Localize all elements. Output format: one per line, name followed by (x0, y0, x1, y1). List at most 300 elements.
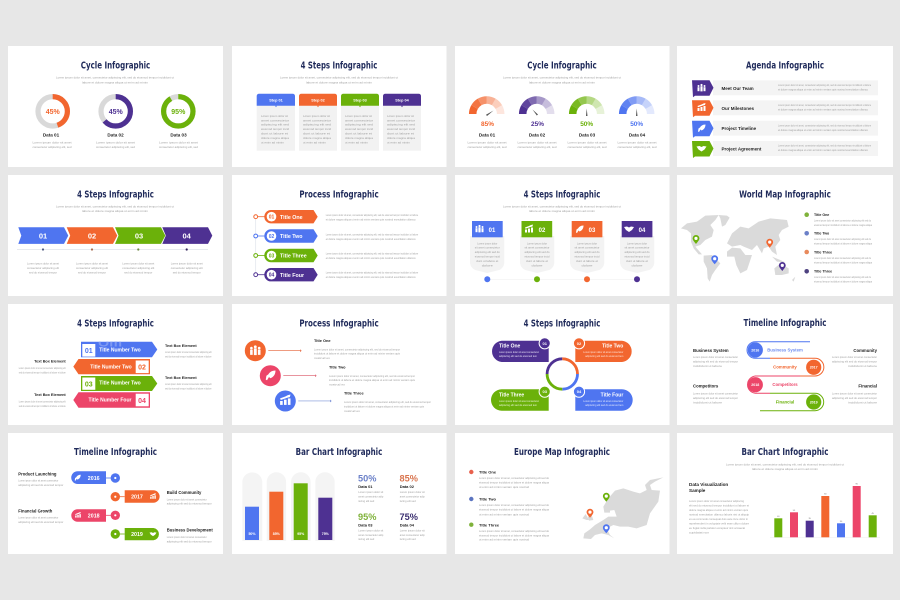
ribbon 02 (73, 359, 150, 374)
step text blocks: consectetur adipiscing elit (27, 266, 59, 270)
map legend 1: Title One (814, 213, 829, 217)
step 03 column: Lorem ipsum dolor sit (345, 114, 372, 118)
gauge 03: consectetur adipiscing elit, sed (568, 145, 607, 149)
node 2017: Community (773, 365, 797, 370)
milestone 2018: Financial Growth (18, 508, 53, 513)
step 02 column: dolore magna aliqua (303, 136, 332, 140)
data labels (32, 133, 198, 149)
card 04: Lorem ipsum dolor (627, 241, 647, 245)
side text boxes: sed do eiusmod tempor incididunt ut labore et dolore (165, 354, 212, 358)
donut 03: 95% (171, 109, 186, 116)
process step 3: Title Three (280, 254, 307, 260)
stat 75%: amet consectetur adip (400, 533, 425, 537)
agenda row 3: Project Timeline (722, 126, 757, 131)
process step 1: Lorem ipsum dolor sit amet, consectetur adipiscing elit, sed do eiusmod tempor incididunt ut labore (326, 213, 418, 217)
ribbon 02: Title Number Two (90, 364, 132, 370)
step 02 column: eiusmod tempor incid (303, 127, 332, 131)
panel: cycle infographic donuts (8, 46, 223, 167)
process step 4: et dolore magna aliqua ut enim ad minim veniam quis nostrud exercitation ullamco (326, 275, 416, 279)
map legend 4: eiusmod tempor incididunt ut labore et dolore magna aliqua (814, 280, 872, 284)
milestone 2019: Business Development (167, 528, 213, 532)
process item 3 (275, 390, 431, 413)
node 2016 (748, 342, 803, 358)
gauge 01: Data 01 (479, 133, 496, 138)
milestone 2017: adipiscing elit sed do eiusmod tempor (167, 502, 212, 506)
step 03 column: dolore magna aliqua (345, 136, 374, 140)
title: World Map Infographic (739, 190, 831, 200)
bar chart: 40 (777, 516, 780, 518)
chevron 04 (162, 227, 212, 244)
title: Europe Map Infographic (514, 447, 610, 458)
connector line (487, 278, 637, 280)
step 02 column: Lorem ipsum dolor sit (303, 114, 330, 118)
intro text (56, 204, 174, 213)
stat 95%: Lorem ipsum dolor sit (358, 528, 383, 532)
card 02: dolore (532, 263, 543, 267)
process step 1: et dolore magna aliqua ut enim ad minim veniam quis nostrud exercitation ullamco (326, 218, 416, 222)
step card 4 (573, 386, 633, 411)
map legend 1: eiusmod tempor incididunt ut labore et dolore magna aliqua (814, 223, 872, 227)
step 01 column: amet consectetur (261, 118, 289, 122)
card 03: dolore (582, 263, 593, 267)
milestone 2017: Lorem ipsum dolor sit amet consectetur (167, 497, 207, 501)
gauge 04: Data 04 (629, 133, 646, 138)
map legend 2: eiusmod tempor incididunt ut labore et dolore magna aliqua (814, 242, 872, 246)
process step 2 (254, 229, 418, 243)
map legend 1 (804, 212, 872, 227)
map legend 2: Title Two (814, 232, 830, 236)
step text blocks: sed do eiusmod tempor (124, 270, 152, 274)
title: 4 Steps Infographic (77, 318, 154, 329)
chevron 04: 04 (183, 231, 192, 240)
data labels: Data 01 (43, 133, 60, 138)
side text boxes: Lorem ipsum dolor sit amet consectetur adipiscing elit (165, 382, 212, 386)
stat 50%: Lorem ipsum dolor sit (358, 490, 383, 494)
process step 2: Title Two (280, 234, 303, 240)
bar chart: 35 (808, 518, 812, 520)
step card 4: adipiscing elit sed do eiusmod tem (585, 403, 624, 407)
map legend 4: Title Three (814, 270, 832, 274)
heading: Sample (689, 488, 706, 493)
process item 2: Title Two (329, 364, 346, 370)
side text boxes: Lorem ipsum dolor sit amet consectetur adipiscing elit (165, 350, 212, 354)
milestone 2016: Lorem ipsum dolor sit amet consectetur (18, 478, 58, 482)
node 2017: 2017 (810, 366, 818, 370)
step card 2 (573, 338, 632, 362)
paragraph (689, 499, 749, 534)
gauge 04: Lorem ipsum dolor sit amet (618, 140, 657, 144)
step 01 column: Lorem ipsum dolor sit (261, 114, 288, 118)
left descriptions: Lorem ipsum dolor sit amet consectetur (693, 392, 738, 396)
legend 3: eiusmod tempor incididunt ut labore et dolore magna aliqua (479, 533, 549, 537)
bar 85%: 85% (273, 532, 281, 536)
title: Bar Chart Infographic (742, 447, 829, 458)
intro text (503, 76, 621, 84)
step text blocks (27, 261, 203, 274)
milestone 2019: adipiscing elit sed do eiusmod tempor (167, 539, 212, 543)
milestone 2019 (111, 528, 213, 543)
process item 3: incididunt ut labore et dolore magna aliqua ut enim ad minim veniam quis (344, 404, 424, 408)
paragraph: eu fugiat nulla pariatur excepteur sint occaecat (689, 526, 745, 530)
card 03: Lorem ipsum dolor (577, 241, 597, 245)
milestone 2019: 2019 (131, 532, 143, 538)
gauge 02 (518, 100, 557, 149)
process item 2: nostrud ex (329, 382, 346, 386)
legend 2: ut enim ad minim veniam quis nostrud (479, 512, 529, 516)
panel: 4 steps columns (232, 46, 446, 167)
milestone 2016: adipiscing elit sed do eiusmod tempor (18, 483, 63, 487)
step text blocks: Lorem ipsum dolor sit amet (76, 261, 108, 265)
step card 3: 03 (542, 389, 548, 394)
map pins (693, 235, 786, 271)
side text boxes: Text Box Element (165, 344, 197, 348)
process item 1: incididunt ut labore et dolore magna aliqua ut enim ad minim veniam quis (314, 352, 400, 356)
card 01: eiusmod tempor incid (475, 254, 500, 258)
agenda row 1: et dolore magna aliqua ut enim ad minim veniam quis nostrud exercitation ullamco (778, 88, 868, 92)
panel: process pills (232, 175, 446, 296)
step 03 column: adipiscing elit sed (345, 123, 374, 127)
step text blocks: Lorem ipsum dolor sit amet (171, 261, 203, 265)
step 04 column: amet consectetur (387, 118, 415, 122)
donut 03 (164, 97, 193, 126)
step text blocks: sed do eiusmod tempor (29, 270, 57, 274)
card 02: eiusmod tempor incid (524, 254, 550, 258)
title: Process Infographic (299, 190, 379, 200)
agenda row 4: Project Agreement (722, 146, 762, 151)
card 03: eiusmod tempor incid (574, 254, 600, 258)
legend 1 (469, 470, 549, 489)
intro text: labore et dolore magna aliqua ut enim ad minim (752, 467, 819, 471)
step text blocks: Lorem ipsum dolor sit amet (27, 261, 59, 265)
bar chart: 95 (855, 484, 859, 486)
agenda row 4 (692, 141, 878, 158)
process step 1: Title One (280, 215, 303, 221)
side text boxes: Text Box Element (34, 393, 66, 397)
legend 1: eiusmod tempor incididunt ut labore et dolore magna aliqua (479, 480, 549, 484)
card 01: sit amet consectetur (475, 246, 500, 250)
milestone 2017 (111, 490, 212, 506)
map legend 4 (804, 269, 872, 284)
intro text (56, 76, 174, 84)
map pins (587, 493, 610, 533)
chevron 01: 01 (39, 231, 47, 240)
right descriptions: Financial (858, 384, 877, 388)
step card 1: Title One (499, 344, 521, 350)
stat 95% (358, 512, 384, 541)
map legend 3: Title Three (814, 250, 832, 254)
donut 02: 45% (109, 109, 123, 116)
process item 3: Lorem ipsum dolor sit amet, consectetur adipiscing elit, sed do eiusmod tempor (344, 400, 431, 404)
card 04 (620, 221, 654, 282)
chevron 02 (67, 227, 117, 244)
card 02: Lorem ipsum dolor (527, 241, 547, 245)
step card 4: 04 (577, 389, 582, 394)
stat 75%: iscing elit sed (400, 537, 416, 541)
process step 2: et dolore magna aliqua ut enim ad minim veniam quis nostrud exercitation ullamco (326, 237, 416, 241)
legend 3: Lorem ipsum dolor sit amet, consectetur adipiscing elit sed do (479, 529, 549, 533)
side text boxes: Lorem ipsum dolor sit amet consectetur adipiscing elit (19, 366, 66, 370)
process step 2: 02 (269, 234, 274, 240)
gauge 03: 50% (580, 121, 593, 128)
legend 2: Title Two (479, 497, 497, 502)
bar 75%: 75% (322, 532, 330, 536)
stat 50%: amet consectetur adip (358, 494, 384, 498)
process item 3: nostrud ex (344, 409, 361, 413)
card 04: sit amet consectetur (624, 246, 650, 250)
ribbon 01 (81, 342, 158, 358)
process step 3: et dolore magna aliqua ut enim ad minim veniam quis nostrud exercitation ullamco (326, 256, 416, 260)
card 02: dunt ut labore et (526, 259, 548, 263)
side text boxes: Lorem ipsum dolor sit amet consectetur adipiscing elit (19, 399, 66, 403)
agenda row 1: Meet Our Team (722, 86, 754, 91)
card 02: sit amet consectetur (524, 246, 550, 250)
intro text: labore et dolore magna aliqua ut enim ad minim (82, 209, 149, 213)
left descriptions: adipiscing elit sed do eiusmod tempor (693, 396, 738, 400)
panel: agenda infographic (677, 46, 893, 167)
card 03 (570, 221, 604, 282)
panel: 4 steps ribbons (8, 304, 223, 425)
ribbon 03 (81, 376, 157, 391)
step 03 column: eiusmod tempor incid (345, 127, 374, 131)
right descriptions: Community (853, 348, 878, 353)
milestone 2018: adipiscing elit sed do eiusmod tempor (18, 520, 63, 524)
bar 50%: 50% (248, 532, 256, 536)
gauge 01 (468, 100, 507, 149)
title: Bar Chart Infographic (296, 447, 383, 458)
map legend 3: eiusmod tempor incididunt ut labore et dolore magna aliqua (814, 260, 872, 264)
paragraph: elit sed do eiusmod tempor incididunt ut labore et (689, 504, 749, 508)
step 04 column: adipiscing elit sed (387, 123, 416, 127)
step card 1: adipiscing elit sed do eiusmod tem (499, 354, 537, 358)
map legend 3 (804, 250, 872, 264)
card 04: dolore (632, 263, 643, 267)
intro text (503, 204, 621, 213)
card 03: adipiscing elit sed do (574, 250, 600, 254)
intro text: labore et dolore magna aliqua ut enim ad minim (529, 80, 596, 84)
side text boxes: sed do eiusmod tempor incididunt ut labore et dolore (19, 370, 66, 374)
bar 95% (291, 472, 311, 541)
step 02 column: amet consectetur (303, 118, 331, 122)
card 01: adipiscing elit sed do (475, 250, 500, 254)
legend 2 (469, 497, 549, 516)
paragraph: Lorem ipsum dolor sit amet consectetur adipiscing (689, 499, 744, 503)
panel: 4 steps ring (455, 304, 670, 425)
stat 95%: iscing elit sed (358, 537, 375, 541)
process step 2: Lorem ipsum dolor sit amet, consectetur adipiscing elit, sed do eiusmod tempor incididunt ut labore (326, 232, 418, 236)
step 03 column: amet consectetur (345, 118, 373, 122)
card 02: adipiscing elit sed do (524, 250, 550, 254)
serpentine path (747, 342, 824, 411)
gauge 04: consectetur adipiscing elit, sed (618, 145, 657, 149)
legend 3 (469, 522, 549, 542)
card 01: Lorem ipsum dolor (477, 241, 497, 245)
card 01 (470, 221, 504, 282)
milestone 2018: Lorem ipsum dolor sit amet consectetur (18, 516, 58, 520)
process item 2 (260, 364, 415, 386)
step 04 column: Lorem ipsum dolor sit (387, 114, 414, 118)
step card 3: adipiscing elit sed do eiusmod tem (499, 403, 537, 407)
node 2019: Financial (776, 400, 794, 404)
milestone 2019: Lorem ipsum dolor sit amet consectetur (167, 535, 207, 539)
intro text: Lorem ipsum dolor sit amet, consectetur adipiscing elit, sed do eiusmod tempor incididunt ut (726, 462, 844, 466)
process step 1 (254, 210, 418, 223)
step 01 column: eiusmod tempor incid (261, 127, 290, 131)
timeline axis with dots (17, 248, 208, 251)
title: 4 Steps Infographic (301, 60, 378, 72)
right descriptions: adipiscing elit sed do eiusmod tempor (832, 360, 877, 364)
ribbon 03: Title Number Two (99, 381, 141, 387)
donut 02 (101, 97, 130, 126)
data labels: Lorem ipsum dolor sit amet (32, 140, 72, 144)
legend 1: Lorem ipsum dolor sit amet, consectetur adipiscing elit sed do (479, 476, 549, 480)
card 04: eiusmod tempor incid (624, 254, 650, 258)
ribbon 02: 02 (138, 364, 146, 372)
step 01 column (257, 94, 295, 151)
panel: europe map (455, 433, 670, 554)
agenda row 3 (692, 121, 878, 138)
side text boxes: sed do eiusmod tempor incididunt ut labore et dolore (19, 404, 66, 408)
card 03: sit amet consectetur (574, 246, 600, 250)
data labels: consectetur adipiscing elit, sed (159, 145, 198, 149)
step 04 column: eiusmod tempor incid (387, 127, 416, 131)
data labels: consectetur adipiscing elit, sed (32, 145, 72, 149)
map legend 3: Lorem ipsum dolor sit amet consectetur adipiscing elit sed do (814, 256, 871, 260)
process item 1 (245, 338, 400, 361)
stat 75%: Lorem ipsum dolor sit (400, 528, 425, 532)
step card 1: Lorem ipsum dolor sit amet consectetur (499, 350, 539, 354)
side text boxes: Text Box Element (165, 376, 197, 380)
gauge 03: Lorem ipsum dolor sit amet (568, 140, 607, 144)
step card 4: Title Four (601, 392, 623, 398)
panel: bar chart sample (677, 433, 893, 554)
step text blocks: consectetur adipiscing elit (171, 266, 203, 270)
stat 75% (400, 512, 425, 541)
intro text: Lorem ipsum dolor sit amet, consectetur adipiscing elit, sed do eiusmod tempor incididunt ut (503, 76, 621, 80)
step 04 column: dolore magna aliqua (387, 136, 416, 140)
process step 4: 04 (269, 273, 274, 279)
title: 4 Steps Infographic (524, 318, 601, 329)
ribbon 03: 03 (85, 381, 93, 388)
node 2017 (773, 360, 821, 375)
gauge 01: Lorem ipsum dolor sit amet (468, 140, 507, 144)
node 2018: Competitors (772, 382, 798, 387)
gauge 02: Data 02 (529, 133, 546, 138)
title: Cycle Infographic (527, 60, 597, 72)
intro text (726, 462, 844, 471)
node 2018: 2018 (751, 383, 759, 387)
stat 85%: Lorem ipsum dolor sit (400, 490, 425, 494)
gauge 03: Data 03 (579, 133, 596, 138)
gauge 04 (618, 100, 657, 149)
card 01: dunt ut labore et (476, 259, 499, 263)
milestone 2018 (18, 508, 120, 524)
stat 75%: Data 04 (400, 522, 415, 527)
bar chart: 45 (871, 513, 875, 515)
paragraph: nostrud exercitation ullamco laboris nisi ut aliquip (689, 512, 749, 516)
step card 2: adipiscing elit sed do eiusmod tem (585, 354, 624, 358)
process item 2: incididunt ut labore et dolore magna aliqua ut enim ad minim veniam quis (329, 378, 415, 382)
card 01: 01 (489, 228, 496, 234)
intro text: Lorem ipsum dolor sit amet, consectetur adipiscing elit, sed do eiusmod tempor incididunt ut (280, 76, 398, 80)
node 2016: 2016 (751, 348, 759, 352)
node 2018 (748, 377, 798, 392)
step 01 column: dolore magna aliqua (261, 136, 290, 140)
step 01 column: ut enim ad minim (261, 140, 284, 144)
agenda row 4: et dolore magna aliqua ut enim ad minim veniam quis nostrud exercitation ullamco (778, 148, 868, 152)
card 04: adipiscing elit sed do (624, 250, 650, 254)
title: Timeline Infographic (744, 318, 827, 329)
agenda row 2 (692, 100, 878, 117)
right descriptions: Lorem ipsum dolor sit amet consectetur (832, 355, 877, 359)
agenda row 2: Our Milestones (722, 106, 755, 111)
step card 2: Lorem ipsum dolor sit amet consectetur (583, 350, 623, 354)
legend 1: ut enim ad minim veniam quis nostrud (479, 485, 529, 489)
panel: bar chart with percentages (232, 433, 446, 554)
data labels: Data 02 (107, 133, 124, 138)
intro text: Lorem ipsum dolor sit amet, consectetur adipiscing elit, sed do eiusmod tempor incididunt ut (56, 204, 174, 208)
title: Timeline Infographic (74, 447, 157, 458)
right descriptions: incididunt ut labore (848, 400, 877, 404)
process step 4: Lorem ipsum dolor sit amet, consectetur adipiscing elit, sed do eiusmod tempor incididunt ut labore (326, 270, 418, 274)
card 03: 03 (589, 228, 596, 234)
ribbon 04 (73, 392, 150, 408)
milestone 2017: Build Community (167, 490, 202, 495)
intro text: Lorem ipsum dolor sit amet, consectetur adipiscing elit, sed do eiusmod tempor incididunt ut (503, 204, 621, 208)
legend 3: Title Three (479, 522, 500, 527)
gauge 02: 25% (531, 121, 544, 128)
side text boxes: sed do eiusmod tempor incididunt ut labore et dolore (165, 386, 212, 390)
card 01: dolore (482, 263, 494, 267)
chevron 01 (18, 227, 68, 244)
process step 4: Title Four (280, 273, 304, 279)
bar chart (770, 484, 880, 538)
stat 95%: amet consectetur adip (358, 533, 384, 537)
europe map silhouette (582, 477, 663, 539)
stat 85%: iscing elit sed (400, 499, 416, 503)
node 2016: Business System (767, 348, 803, 352)
map legend 4: Lorem ipsum dolor sit amet consectetur adipiscing elit sed do (814, 275, 871, 279)
card 03: dunt ut labore et (576, 259, 598, 263)
paragraph: ex ea commodo consequat duis aute irure dolor in (689, 517, 748, 521)
step text blocks: Lorem ipsum dolor sit amet (122, 261, 154, 265)
panel: cycle infographic gauges (455, 46, 670, 167)
stat 85%: amet consectetur adip (400, 494, 425, 498)
card 04: 04 (639, 228, 646, 234)
donut 01: 45% (46, 109, 60, 116)
side text boxes: Text Box Element (34, 360, 66, 364)
step 02 column: dunt ut labore et (303, 132, 330, 136)
node 2019: 2019 (810, 400, 818, 404)
chevron 03: 03 (135, 231, 143, 240)
data labels: Lorem ipsum dolor sit amet (159, 140, 198, 144)
stat 95%: 95% (358, 512, 376, 522)
data labels: consectetur adipiscing elit, sed (96, 145, 135, 149)
gauge 04: 50% (630, 121, 643, 128)
legend 2: Lorem ipsum dolor sit amet, consectetur adipiscing elit sed do (479, 503, 549, 507)
left descriptions: Competitors (693, 384, 719, 388)
step card 2: 02 (577, 341, 582, 346)
heading (689, 482, 728, 493)
process step 1: 01 (269, 215, 274, 221)
agenda row 1 (692, 80, 878, 97)
data labels: Data 03 (170, 133, 187, 138)
chevron 02: 02 (88, 231, 96, 240)
donut 01 (38, 97, 67, 126)
ribbon 04: 04 (138, 398, 146, 405)
legend 1: Title One (479, 470, 497, 475)
process item 2: Lorem ipsum dolor sit amet, consectetur adipiscing elit, sed do eiusmod tempor (329, 374, 415, 378)
bar 95%: 95% (297, 532, 305, 536)
